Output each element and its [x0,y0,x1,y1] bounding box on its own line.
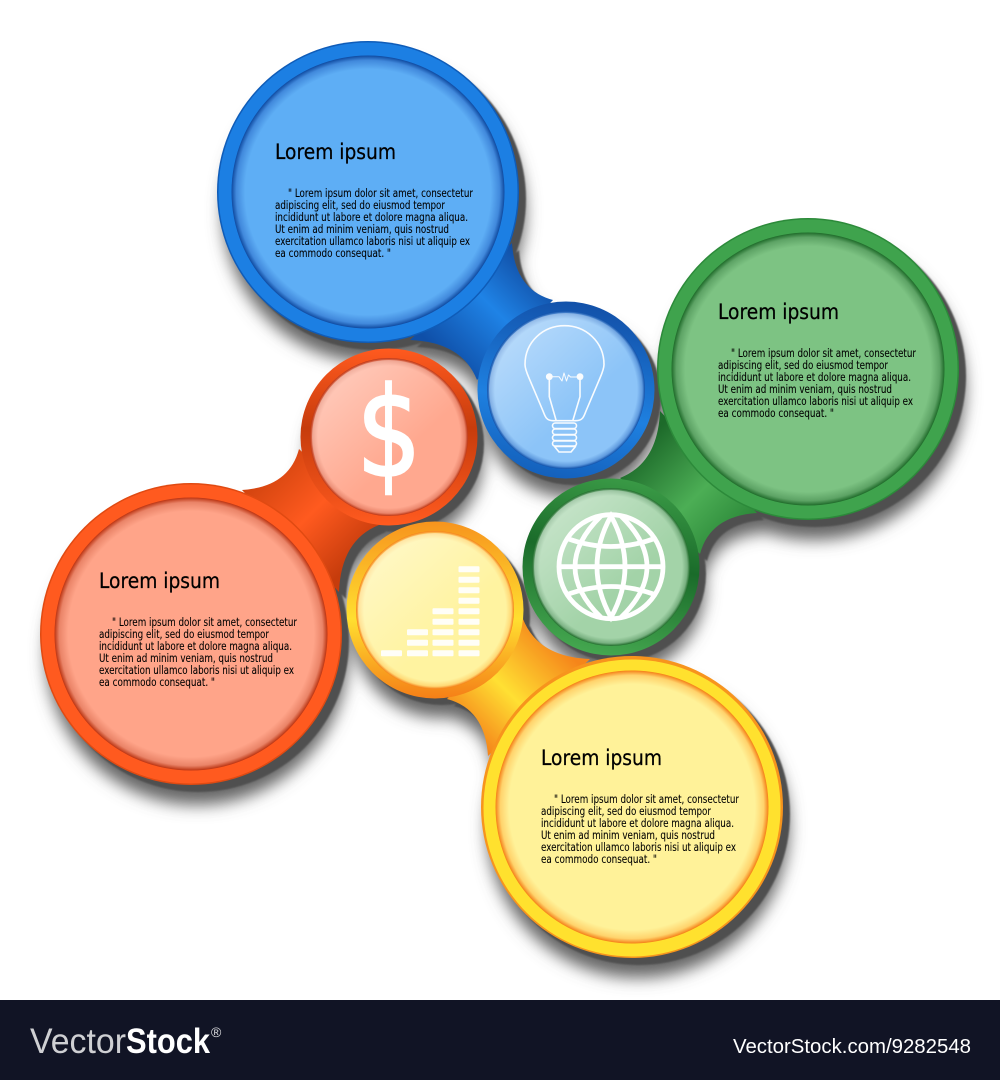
green heading: Lorem ipsum [718,300,839,324]
footer bar [0,1000,1000,1080]
panel: red [40,348,478,785]
red body text [99,615,297,689]
blue body text: ea commodo consequat. " [275,246,391,260]
red body text: exercitation ullamco laboris nisi ut aliquip ex [99,663,294,677]
red body text: Ut enim ad minim veniam, quis nostrud [99,651,273,665]
blue body text: " Lorem ipsum dolor sit amet, consectetur [288,186,473,200]
yellow small disc [356,531,514,689]
footer logo: ® [211,1024,222,1040]
yellow large disc [496,670,768,944]
green large disc [672,232,944,506]
red connector [242,449,379,592]
blue heading: Lorem ipsum [275,140,396,164]
red body text: ea commodo consequat. " [99,675,215,689]
blue large rim [217,41,519,343]
soft drop shadows [46,61,965,978]
green small disc [532,488,690,646]
green small rim [522,478,700,656]
yellow body text: ea commodo consequat. " [541,852,657,866]
red heading: Lorem ipsum [99,569,220,593]
yellow body text: exercitation ullamco laboris nisi ut aliquip ex [541,840,736,854]
yellow body text: Ut enim ad minim veniam, quis nostrud [541,828,715,842]
blue large disc [232,56,504,328]
blue body text [275,186,473,260]
red body text: adipiscing elit, sed do eiusmod tempor [99,627,269,641]
yellow body text [541,792,739,866]
green body text: ea commodo consequat. " [718,406,834,420]
red body text: " Lorem ipsum dolor sit amet, consectetur [112,615,297,629]
green body text: Ut enim ad minim veniam, quis nostrud [718,382,892,396]
green body text: incididunt ut labore et dolore magna aliqua. [718,370,911,384]
red small rim [300,348,478,526]
panel: green [522,218,959,656]
green connector [620,411,757,554]
footer image id: VectorStock.com/9282548 [733,1036,971,1058]
yellow heading: Lorem ipsum [541,746,662,770]
footer logo: Vector [30,1022,126,1061]
green body text: exercitation ullamco laboris nisi ut aliquip ex [718,394,913,408]
footer logo [30,1022,222,1061]
yellow large rim [481,656,783,958]
footer logo: Stock [126,1022,210,1061]
hard drop shadows [47,48,966,965]
green body text [718,346,916,420]
blue connector [410,243,553,380]
green body text: " Lorem ipsum dolor sit amet, consectetur [731,346,916,360]
icon: globe [558,515,664,619]
panel: blue [217,41,654,478]
icon: bar chart [381,566,480,656]
blue small disc [487,311,645,469]
green large rim [657,218,959,520]
blue body text: incididunt ut labore et dolore magna aliqua. [275,210,468,224]
green body text: adipiscing elit, sed do eiusmod tempor [718,358,888,372]
icon: dollar sign: $ [357,361,421,506]
yellow body text: incididunt ut labore et dolore magna aliqua. [541,816,734,830]
blue small rim [478,302,654,478]
icon: light bulb [525,326,604,452]
blue body text: exercitation ullamco laboris nisi ut aliquip ex [275,234,470,248]
yellow small rim [346,522,524,698]
red large rim [40,483,342,785]
red body text: incididunt ut labore et dolore magna aliqua. [99,639,292,653]
blue body text: adipiscing elit, sed do eiusmod tempor [275,198,445,212]
panel: yellow [346,522,783,958]
red small disc [310,358,468,516]
blue body text: Ut enim ad minim veniam, quis nostrud [275,222,449,236]
yellow body text: " Lorem ipsum dolor sit amet, consectetur [554,792,739,806]
red large disc [54,498,328,770]
yellow body text: adipiscing elit, sed do eiusmod tempor [541,804,711,818]
yellow connector [447,619,590,756]
